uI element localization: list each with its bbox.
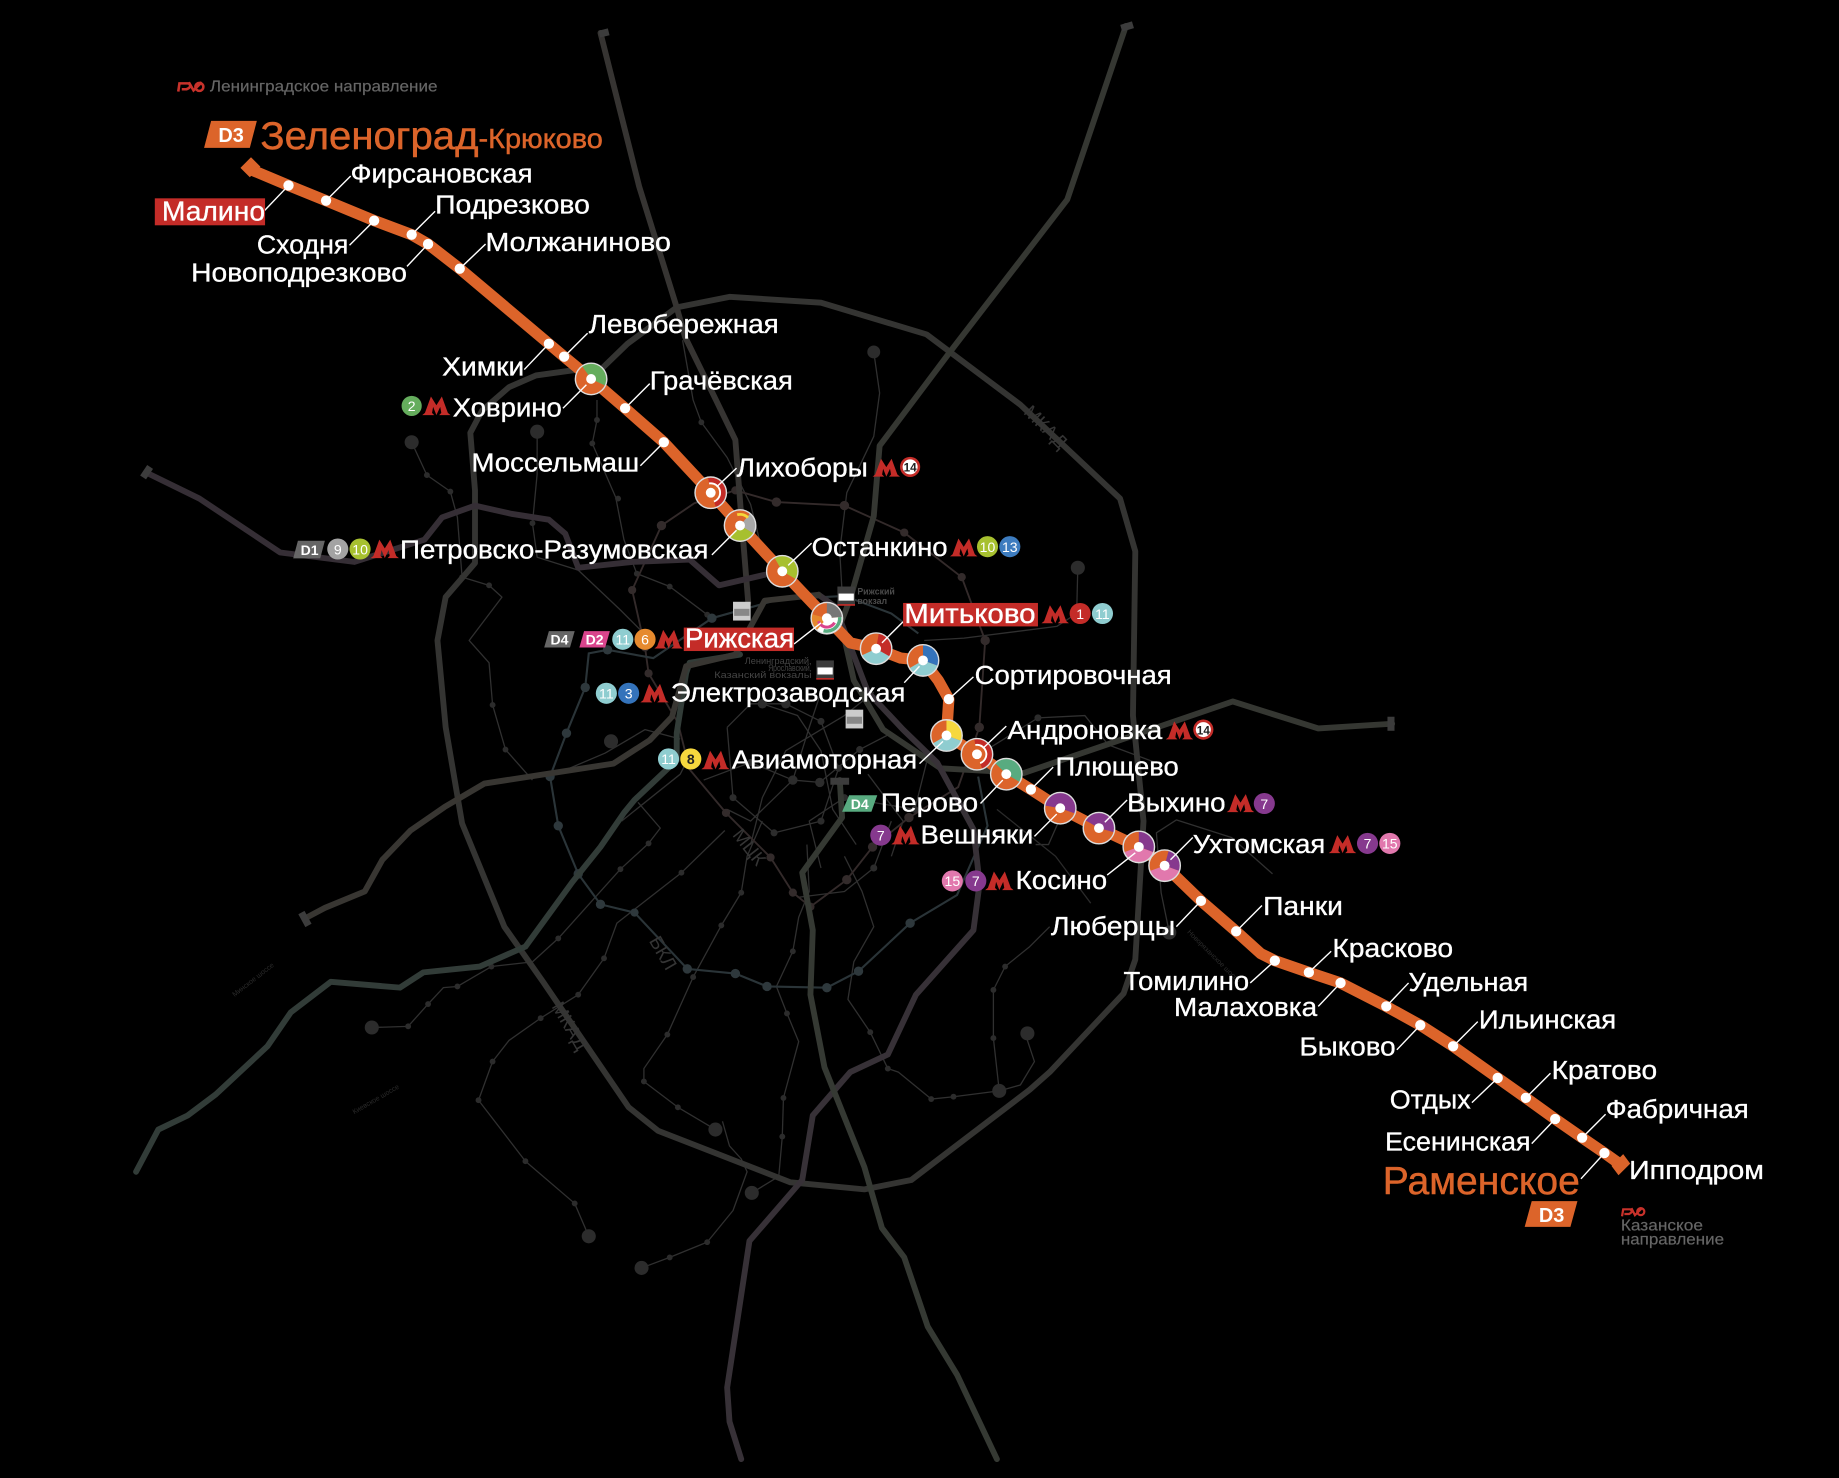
station: Отдых: Отдых xyxy=(1390,1086,1471,1114)
badge: D3: D3 xyxy=(1539,1205,1564,1227)
station: Ховрино: Ховрино xyxy=(453,394,562,422)
station: Ухтомская: Ухтомская xyxy=(1193,831,1325,859)
icon: metro M xyxy=(1329,835,1356,853)
badge: line 1: 1 xyxy=(1076,606,1084,622)
badge: line 11: 11 xyxy=(1095,606,1110,622)
badge: line 11: 11 xyxy=(661,751,676,767)
station: Люберцы xyxy=(1051,896,1206,941)
station: Плющево xyxy=(1026,753,1179,795)
badge: line 15: 15 xyxy=(945,873,960,889)
station: Останкино xyxy=(767,534,1020,587)
station: Есенинская xyxy=(1385,1114,1560,1157)
badge: line 11: 11 xyxy=(615,632,630,648)
icon: metro M xyxy=(891,826,920,844)
D3 orange line xyxy=(252,170,1621,1165)
badge: line 7: 7 xyxy=(1364,836,1372,852)
badge: line 1 xyxy=(1070,603,1091,624)
badge: line 9: 9 xyxy=(334,541,342,557)
station: Митьково: Митьково xyxy=(904,598,1036,629)
station: Малино: Малино xyxy=(162,196,265,227)
badge: line 14: 14 xyxy=(1197,724,1210,737)
badge: line 3: 3 xyxy=(625,686,633,702)
station: Новоподрезково: Новоподрезково xyxy=(191,260,407,288)
background: MKAD ring xyxy=(437,297,1144,1189)
station: Химки: Химки xyxy=(442,353,524,381)
icon: metro M xyxy=(654,630,683,648)
badge: line 13 xyxy=(999,536,1020,557)
station: Андроновка: Андроновка xyxy=(1007,717,1163,745)
station: Вешняки: Вешняки xyxy=(921,821,1033,849)
station: Лихоборы xyxy=(695,454,920,508)
station: Есенинская: Есенинская xyxy=(1385,1129,1531,1157)
badge: line 10 xyxy=(977,536,998,557)
badge: line 7: 7 xyxy=(1260,796,1268,812)
heading: Ramenskoye: Раменское xyxy=(1383,1160,1580,1203)
icon: metro M xyxy=(873,459,900,477)
station: Люберцы: Люберцы xyxy=(1051,913,1175,941)
station: Панки: Панки xyxy=(1263,893,1343,921)
station: Ухтомская xyxy=(1149,831,1400,881)
station: Левобережная xyxy=(559,311,779,362)
station: Красково: Красково xyxy=(1332,935,1453,963)
badge: D4: D4 xyxy=(550,632,569,648)
background: MCC ring xyxy=(628,486,990,911)
badge: line 11 xyxy=(1092,603,1113,624)
icon: Rizhsky station: вокзал xyxy=(857,596,887,606)
station: Новоподрезково xyxy=(191,239,433,288)
station: Ильинская: Ильинская xyxy=(1479,1007,1616,1035)
map labels: roads: МЦК xyxy=(729,825,770,870)
station: Останкино: Останкино xyxy=(812,534,948,562)
badge: line 3 xyxy=(618,683,639,704)
station: Левобережная: Левобережная xyxy=(589,311,779,339)
station: Перово xyxy=(842,758,1022,818)
station: Авиамоторная xyxy=(658,720,962,774)
station: Молжаниново: Молжаниново xyxy=(486,229,671,257)
badge: line 13: 13 xyxy=(1002,539,1018,555)
station: Томилино: Томилино xyxy=(1124,968,1249,996)
badge: line 15 xyxy=(1379,833,1400,854)
icon: metro M xyxy=(985,872,1014,890)
badge: line 15 xyxy=(942,870,963,891)
map labels: roads: МКАД xyxy=(1020,401,1072,453)
badge: line 11: 11 xyxy=(599,686,614,702)
badge: D3 xyxy=(1525,1201,1577,1227)
station: Быково: Быково xyxy=(1299,1034,1396,1062)
station: Подрезково: Подрезково xyxy=(435,192,590,220)
station: Авиамоторная: Авиамоторная xyxy=(732,746,917,774)
footer: Kazan direction xyxy=(1621,1208,1724,1248)
icon: metro M xyxy=(422,397,451,415)
badge: D2 xyxy=(579,631,610,648)
station: Рижская xyxy=(544,602,843,654)
badge: line 6: 6 xyxy=(641,632,649,648)
badge: line 14 xyxy=(1193,720,1213,740)
icon: three stations xyxy=(714,656,834,680)
badge: line 6 xyxy=(635,629,656,650)
badge: line 14: 14 xyxy=(904,462,917,475)
heading: Zelenograd-Kryukovo xyxy=(204,115,603,158)
badge: line 11 xyxy=(612,629,633,650)
station: Рижская: Рижская xyxy=(685,623,794,654)
background: thin metro lines xyxy=(372,340,1273,1268)
badge: D4 xyxy=(842,795,877,812)
station: Фабричная xyxy=(1577,1096,1749,1143)
background: BKL ring xyxy=(545,596,988,992)
badge: D2: D2 xyxy=(586,632,604,648)
icon: RZD logo xyxy=(1622,1208,1644,1216)
station: Ипподром: Ипподром xyxy=(1629,1157,1764,1185)
station: Подрезково xyxy=(407,192,590,240)
station: Химки xyxy=(442,339,554,381)
station: Косино xyxy=(942,831,1155,895)
badge: line 8: 8 xyxy=(687,751,695,767)
station: Малино xyxy=(155,180,294,227)
icon: metro M xyxy=(640,684,669,702)
badge: D1 xyxy=(293,541,325,558)
map labels: roads: Киевское шоссе xyxy=(352,1084,401,1116)
icon: metro M xyxy=(371,540,399,558)
terminal: north xyxy=(240,157,260,177)
terminal: south xyxy=(1611,1154,1630,1175)
station: Вешняки xyxy=(870,792,1076,849)
icon: RZD logo xyxy=(178,82,203,92)
header: Leningrad direction: Ленинградское направление xyxy=(210,79,438,96)
badge: line 10 xyxy=(350,538,371,560)
station: Выхино xyxy=(1083,790,1275,844)
station: Электрозаводская xyxy=(596,645,939,707)
badge: line 7 xyxy=(870,825,891,846)
background: radial railway lines xyxy=(136,26,1392,1459)
station: Сходня xyxy=(257,215,379,259)
station: Кратово xyxy=(1521,1057,1657,1103)
station: Малаховка xyxy=(1174,978,1346,1022)
badge: line 9 xyxy=(327,538,348,560)
station: Моссельмаш: Моссельмаш xyxy=(471,450,639,478)
station: Петровско-Разумовская: Петровско-Разумовская xyxy=(400,536,708,564)
icon: metro M xyxy=(1227,794,1254,812)
station: Удельная: Удельная xyxy=(1409,969,1528,997)
station: Грачёвская xyxy=(620,367,793,413)
icon: three stations: Ленинградский, xyxy=(745,656,812,666)
station: Андроновка xyxy=(961,717,1213,770)
station: Малаховка: Малаховка xyxy=(1174,994,1318,1022)
station: Красково xyxy=(1304,935,1453,978)
stations xyxy=(155,160,1764,1185)
station: Кратово: Кратово xyxy=(1552,1057,1657,1085)
map labels: roads: МКАД xyxy=(548,998,592,1054)
map labels: roads: Минское шоссе xyxy=(231,962,276,999)
icon: Rizhsky station xyxy=(837,587,895,606)
badge: D4: D4 xyxy=(851,796,869,812)
icon: train station xyxy=(733,602,751,621)
icon: metro M xyxy=(701,751,730,769)
station: Сортировочная: Сортировочная xyxy=(975,662,1172,690)
badge: line 7 xyxy=(965,870,986,891)
station: Молжаниново xyxy=(455,229,671,274)
map labels: roads: Новорязанское шоссе xyxy=(1185,929,1241,985)
central train stations xyxy=(714,587,895,728)
icon: train station south xyxy=(846,710,863,728)
station: Петровско-Разумовская xyxy=(293,510,756,564)
footer: Kazan direction: направление xyxy=(1621,1231,1724,1248)
map labels: roads: БКЛ xyxy=(645,932,681,974)
badge: D3: D3 xyxy=(218,125,244,147)
station: Томилино xyxy=(1124,956,1280,996)
station: Отдых xyxy=(1390,1073,1503,1114)
station: Лихоборы: Лихоборы xyxy=(737,454,868,482)
badge: line 15: 15 xyxy=(1382,836,1398,852)
badge: line 8 xyxy=(680,748,701,769)
station: Сходня: Сходня xyxy=(257,231,348,259)
station: Митьково xyxy=(860,598,1113,664)
station: Выхино: Выхино xyxy=(1127,790,1226,818)
station: Фабричная: Фабричная xyxy=(1606,1096,1749,1124)
station: Грачёвская: Грачёвская xyxy=(650,367,793,395)
station: Быково xyxy=(1299,1020,1425,1062)
station: Фирсановская: Фирсановская xyxy=(351,160,532,188)
badge: line 10: 10 xyxy=(352,541,368,557)
background: line terminals xyxy=(143,25,1391,925)
badge: line 10: 10 xyxy=(980,539,996,555)
badge: line 7 xyxy=(1254,793,1275,814)
icon: metro M xyxy=(950,538,977,556)
badge: D1: D1 xyxy=(301,542,319,558)
icon: three stations: Ярославский, xyxy=(768,663,812,673)
station: Ховрино xyxy=(402,363,607,422)
heading: Zelenograd-Kryukovo: -Крюково xyxy=(479,123,603,154)
icon: metro M xyxy=(1166,721,1193,739)
badge: line 7 xyxy=(1357,833,1378,854)
badge: line 14 xyxy=(900,457,920,477)
station: Ипподром xyxy=(1581,1148,1764,1185)
badge: line 11 xyxy=(658,748,679,769)
station: Электрозаводская: Электрозаводская xyxy=(671,679,905,707)
station: Панки xyxy=(1231,893,1343,937)
heading: Ramenskoye xyxy=(1383,1160,1580,1227)
footer: Kazan direction: Казанское xyxy=(1621,1217,1703,1234)
station: Ильинская xyxy=(1448,1007,1616,1051)
badge: line 2 xyxy=(402,396,422,416)
station: Удельная xyxy=(1381,969,1528,1012)
station: Перово: Перово xyxy=(881,790,978,818)
heading: Zelenograd-Kryukovo: Зеленоград xyxy=(260,115,479,158)
map labels: roads xyxy=(231,401,1241,1116)
badge: line 7: 7 xyxy=(972,873,980,889)
station: Косино: Косино xyxy=(1016,867,1107,895)
background: thin metro line stations xyxy=(365,346,1176,1275)
badge: D3 xyxy=(204,121,257,148)
badge: line 11 xyxy=(596,683,617,704)
badge: D4 xyxy=(544,631,575,648)
station: Сортировочная xyxy=(944,662,1172,704)
station: Фирсановская xyxy=(321,160,532,206)
badge: line 2: 2 xyxy=(408,398,416,414)
icon: three stations: Казанский вокзалы xyxy=(714,670,812,680)
station: Плющево: Плющево xyxy=(1056,753,1179,781)
badge: line 7: 7 xyxy=(877,827,885,843)
icon: Rizhsky station: Рижский xyxy=(857,587,895,597)
station: Моссельмаш xyxy=(471,437,669,478)
icon: metro M xyxy=(1041,605,1069,623)
